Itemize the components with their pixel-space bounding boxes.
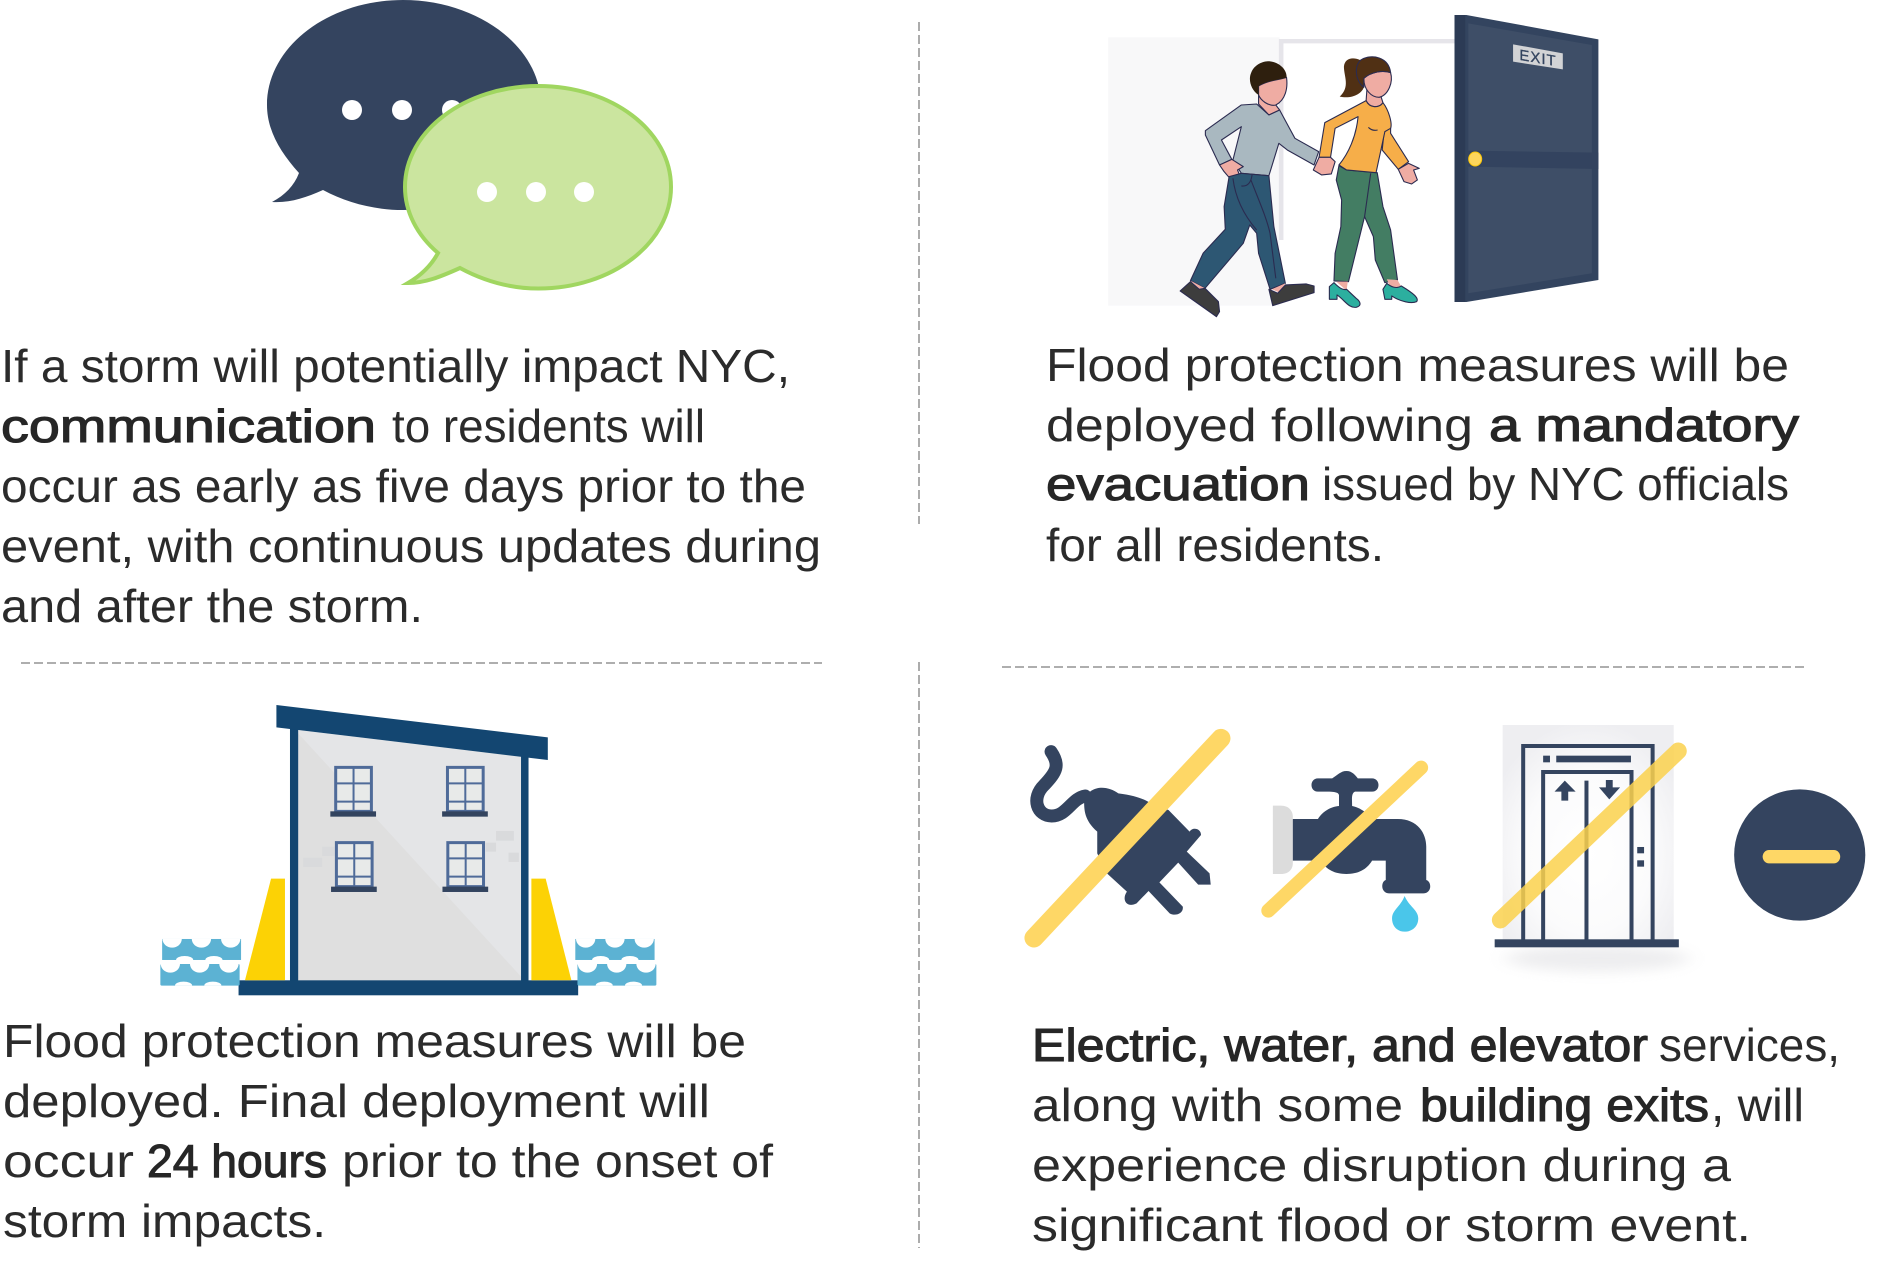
green speech bubble: [405, 86, 671, 288]
text: communication: communication: [1, 400, 376, 452]
text: mandatory evacuation: issued by NYC officials: [1322, 458, 1789, 510]
text: mandatory evacuation: for all residents.: [1046, 519, 1384, 571]
room background: [1108, 37, 1280, 306]
text: flood protection deployment: storm impacts.: [3, 1195, 326, 1247]
text: communication: If a storm will potentially impact NYC,: [1, 340, 790, 392]
text: flood protection deployment: prior to the onset of: [342, 1135, 773, 1187]
building wall: [298, 730, 521, 980]
text: flood protection deployment: 24 hours: [147, 1135, 327, 1187]
windows: [330, 767, 488, 892]
icon: crossed-out water tap: [1268, 768, 1430, 932]
icon: no entry sign: [1734, 789, 1865, 921]
man: [1180, 61, 1319, 317]
text: service disruption: along with some: [1032, 1079, 1403, 1131]
text: communication: occur as early as five days prior to the: [1, 460, 806, 512]
text: communication: [1, 340, 821, 632]
illustration: building with flood barriers: [160, 705, 656, 995]
text: service disruption: Electric, water, and elevator: [1032, 1019, 1648, 1071]
icon: crossed-out elevator: [1495, 725, 1689, 972]
text: mandatory evacuation: evacuation: [1046, 458, 1310, 510]
dark speech bubble: [267, 0, 541, 210]
text: flood protection deployment: deployed. Final deployment will: [3, 1075, 710, 1127]
text: communication: and after the storm.: [1, 580, 423, 632]
water waves: [160, 939, 656, 986]
flood barriers: [245, 879, 571, 980]
text: mandatory evacuation: Flood protection measures will be: [1046, 339, 1789, 391]
text: flood protection deployment: occur: [3, 1135, 134, 1187]
woman: [1313, 57, 1419, 307]
text: mandatory evacuation: [1046, 339, 1799, 571]
text: service disruption: experience disruption during a: [1032, 1139, 1731, 1191]
icon: crossed-out electric plug: [1034, 738, 1221, 938]
exit door: [1455, 15, 1598, 302]
text: service disruption: , will: [1711, 1079, 1804, 1131]
door frame: [1279, 39, 1456, 240]
text: mandatory evacuation: deployed following: [1046, 399, 1473, 451]
icons: disrupted services: [1034, 725, 1865, 972]
exit sign label: EXIT: [1519, 47, 1557, 70]
building frame and roof: [239, 705, 578, 995]
text: mandatory evacuation: a mandatory: [1489, 399, 1799, 451]
icon: speech bubbles: [267, 0, 671, 288]
text: communication: event, with continuous updates during: [1, 520, 821, 572]
text: service disruption: [1032, 1019, 1840, 1251]
text: service disruption: building exits: [1420, 1079, 1709, 1131]
text: service disruption: services,: [1659, 1019, 1840, 1071]
illustration: couple leaving through exit door: [1108, 15, 1598, 317]
text: flood protection deployment: Flood protection measures will be: [3, 1015, 746, 1067]
text: flood protection deployment: [3, 1015, 773, 1247]
text: communication: to residents will: [392, 400, 705, 452]
text: service disruption: significant flood or storm event.: [1032, 1199, 1751, 1251]
